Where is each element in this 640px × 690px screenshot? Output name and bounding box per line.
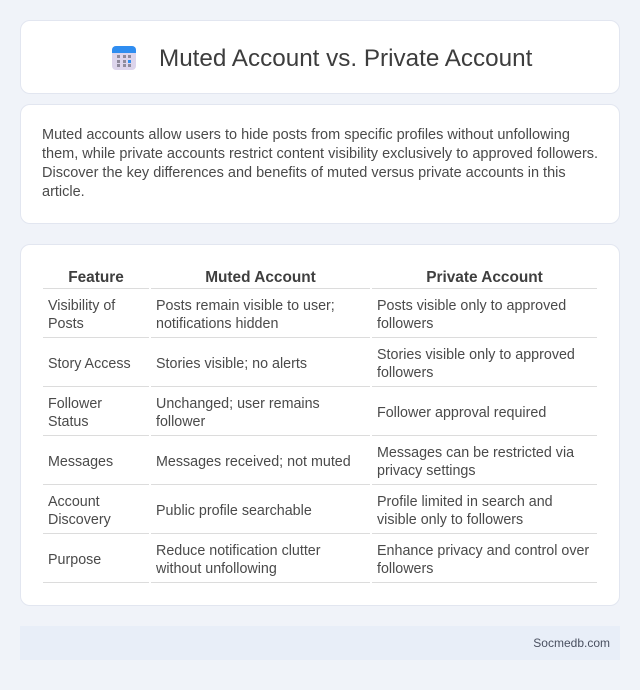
panel: introduction bbox=[20, 104, 620, 224]
intro text: article. bbox=[42, 184, 85, 200]
icon: calendar bbox=[112, 46, 136, 70]
row: Follower Status: Follower bbox=[48, 396, 102, 412]
row: Messages: Messages bbox=[48, 454, 113, 470]
row: Messages: Messages received; not muted bbox=[156, 454, 351, 470]
header: Private Account: Private Account bbox=[426, 269, 543, 286]
row: Purpose: Purpose bbox=[48, 552, 101, 568]
row: Purpose: Enhance privacy and control over bbox=[377, 543, 589, 559]
intro text: Discover the key differences and benefits of muted versus private accounts in this bbox=[42, 165, 566, 181]
row: Visibility of Posts bbox=[48, 298, 566, 332]
footer source text: Socmedb.com bbox=[533, 636, 610, 650]
panel: comparison table bbox=[20, 244, 620, 606]
row: Story Access: Story Access bbox=[48, 356, 131, 372]
row: Purpose bbox=[48, 543, 589, 577]
intro text bbox=[42, 126, 598, 200]
row: Visibility of Posts: Visibility of bbox=[48, 298, 115, 314]
row: Purpose: without unfollowing bbox=[156, 561, 277, 577]
row: Follower Status: Unchanged; user remains bbox=[156, 396, 320, 412]
row: Follower Status: Follower approval required bbox=[377, 405, 546, 421]
intro text: them, while private accounts restrict content visibility exclusively to approved followers. bbox=[42, 146, 598, 162]
row: Account Discovery: visible only to followers bbox=[377, 512, 523, 528]
row: Visibility of Posts: followers bbox=[377, 316, 433, 332]
row: Purpose: Reduce notification clutter bbox=[156, 543, 321, 559]
row: Story Access: followers bbox=[377, 365, 433, 381]
row: Messages: privacy settings bbox=[377, 463, 476, 479]
title: Muted Account vs. Private Account bbox=[159, 45, 532, 72]
row: Account Discovery bbox=[48, 494, 553, 528]
row: Visibility of Posts: Posts bbox=[48, 316, 84, 332]
row: Visibility of Posts: notifications hidden bbox=[156, 316, 278, 332]
row: Account Discovery: Public profile searchable bbox=[156, 503, 312, 519]
row: Account Discovery: Discovery bbox=[48, 512, 111, 528]
row: Messages bbox=[48, 445, 574, 479]
row: Story Access: Stories visible; no alerts bbox=[156, 356, 307, 372]
header: Muted Account: Muted Account bbox=[205, 269, 316, 286]
row: Follower Status: Status bbox=[48, 414, 89, 430]
row: Story Access: Stories visible only to approved bbox=[377, 347, 575, 363]
row: Account Discovery: Account bbox=[48, 494, 100, 510]
row: Follower Status bbox=[48, 396, 546, 430]
row: Follower Status: follower bbox=[156, 414, 205, 430]
panel: title card bbox=[20, 20, 620, 94]
row: Purpose: followers bbox=[377, 561, 433, 577]
row: Story Access bbox=[48, 347, 575, 381]
footer bar bbox=[20, 626, 620, 660]
row: Account Discovery: Profile limited in search and bbox=[377, 494, 553, 510]
header: Feature: Feature bbox=[68, 269, 124, 286]
intro text: Muted accounts allow users to hide posts from specific profiles without unfollowing bbox=[42, 126, 570, 142]
row: Visibility of Posts: Posts remain visible to user; bbox=[156, 298, 335, 314]
row: Messages: Messages can be restricted via bbox=[377, 445, 574, 461]
row: Visibility of Posts: Posts visible only to approved bbox=[377, 298, 566, 314]
